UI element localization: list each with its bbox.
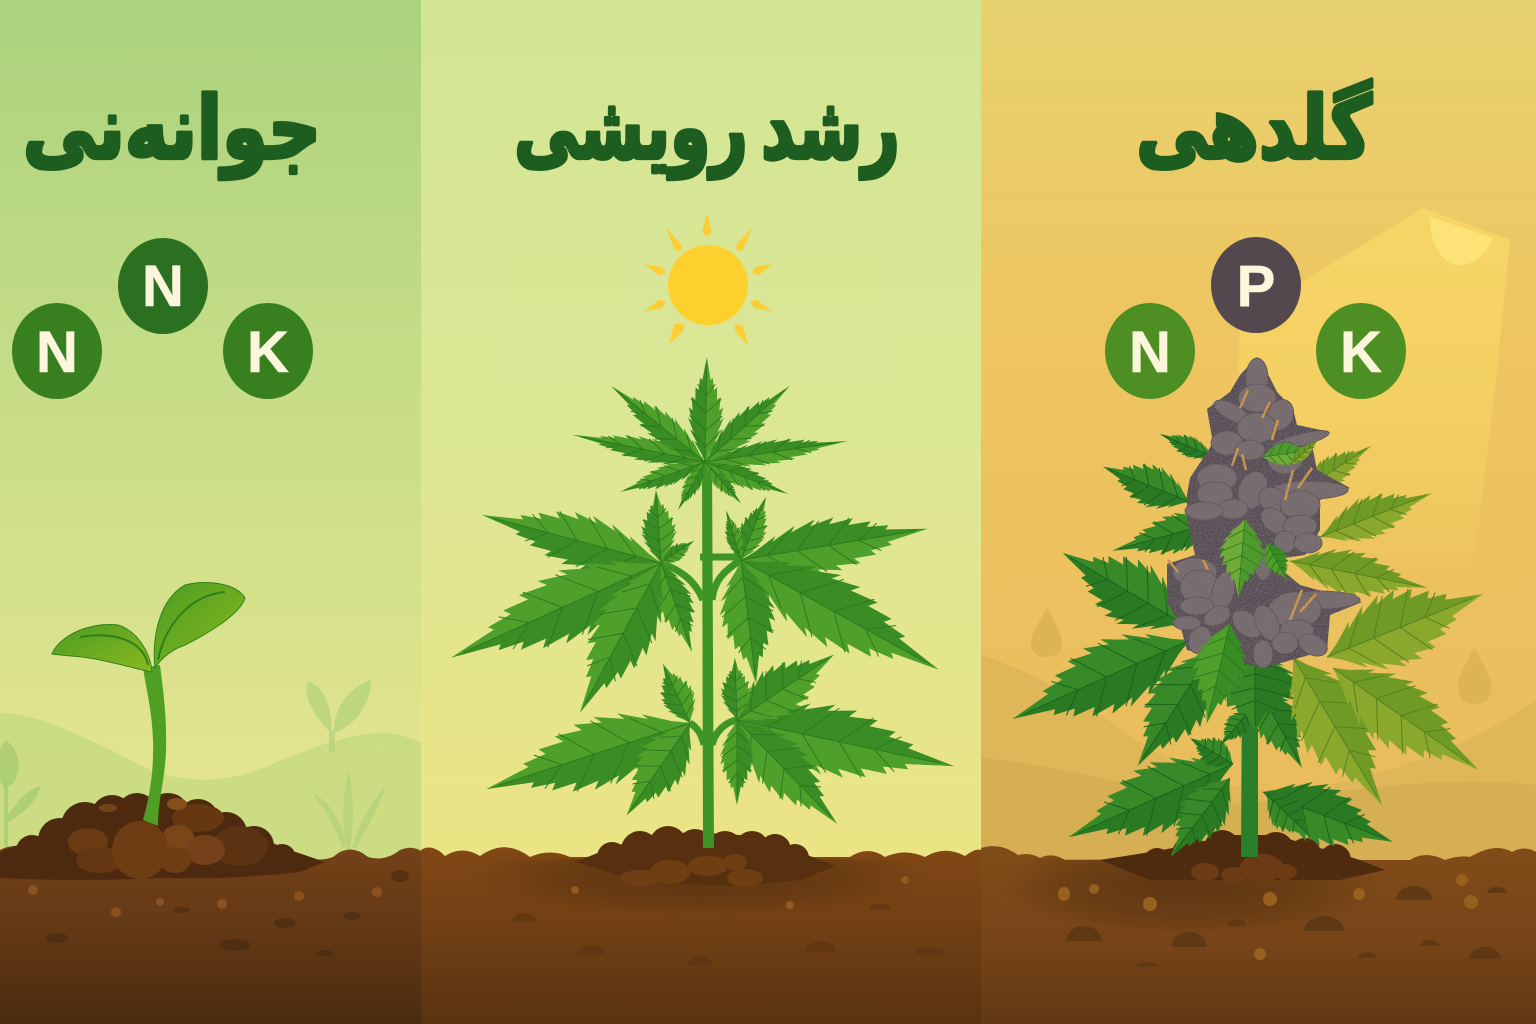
- nutrient K: [223, 303, 313, 399]
- icon: sun: [644, 213, 773, 345]
- branches: [661, 557, 741, 745]
- seedling stem: [143, 665, 166, 826]
- title: flowering: گلدهی: [1136, 78, 1372, 179]
- seedling right leaf: [154, 583, 245, 668]
- nutrient N flowering: [1105, 303, 1195, 399]
- nutrient K flowering: K: [1340, 320, 1382, 385]
- title: vegetative growth: رشد رویشی: [514, 79, 900, 179]
- lower dark leaves: [998, 424, 1404, 872]
- upper yellow green leaves: [1260, 433, 1498, 825]
- middle right fan leaf: [713, 492, 956, 701]
- soil ground: vegetative: [421, 833, 981, 1024]
- flowering stem: [1241, 680, 1258, 857]
- nutrient P flowering: P: [1237, 254, 1275, 319]
- nutrient N flowering: N: [1129, 320, 1171, 385]
- top fan leaf: [570, 357, 849, 514]
- panel: flowering stage background: [981, 0, 1536, 870]
- light beam: [1230, 208, 1510, 600]
- background hills: [0, 713, 421, 870]
- soil mound vegetative: [575, 826, 835, 887]
- plant: seedling: [0, 583, 325, 880]
- nutrient N top: [118, 238, 208, 334]
- panel: germination stage background: [0, 0, 421, 870]
- front leaves over buds: [1180, 434, 1324, 730]
- icon: faint water drop right: [1458, 648, 1491, 704]
- stem: [702, 460, 714, 848]
- soil mound seedling back: [0, 793, 325, 880]
- icon: grow lamp: [1430, 217, 1493, 265]
- nutrient K: K: [247, 320, 289, 385]
- nutrient N left: N: [36, 320, 78, 385]
- plant: flowering cannabis: [998, 357, 1498, 883]
- soil lumps seedling front: [68, 798, 268, 879]
- ghost plants right: [307, 680, 386, 850]
- nutrient P flowering: [1211, 237, 1301, 333]
- ghost plants left: [0, 740, 41, 847]
- seedling left leaf: [52, 625, 152, 672]
- nutrient K flowering: [1316, 303, 1406, 399]
- soil ground: germination: [0, 846, 421, 1024]
- cola buds: [1167, 357, 1362, 668]
- middle left fan leaf: [437, 488, 709, 728]
- icon: faint water drop left: [1031, 608, 1062, 657]
- soil mound flowering: [1100, 830, 1385, 883]
- nutrient N top: N: [142, 254, 184, 319]
- hills: [981, 655, 1536, 870]
- plant: vegetative cannabis: [437, 357, 962, 887]
- soil ground: flowering: [981, 835, 1536, 1024]
- title: germination: جوانه‌نی: [23, 78, 321, 180]
- panel: vegetative stage background: [421, 0, 981, 870]
- lower right fan leaf: [717, 633, 962, 843]
- nutrient N left: [12, 303, 102, 399]
- lower left fan leaf: [476, 657, 712, 830]
